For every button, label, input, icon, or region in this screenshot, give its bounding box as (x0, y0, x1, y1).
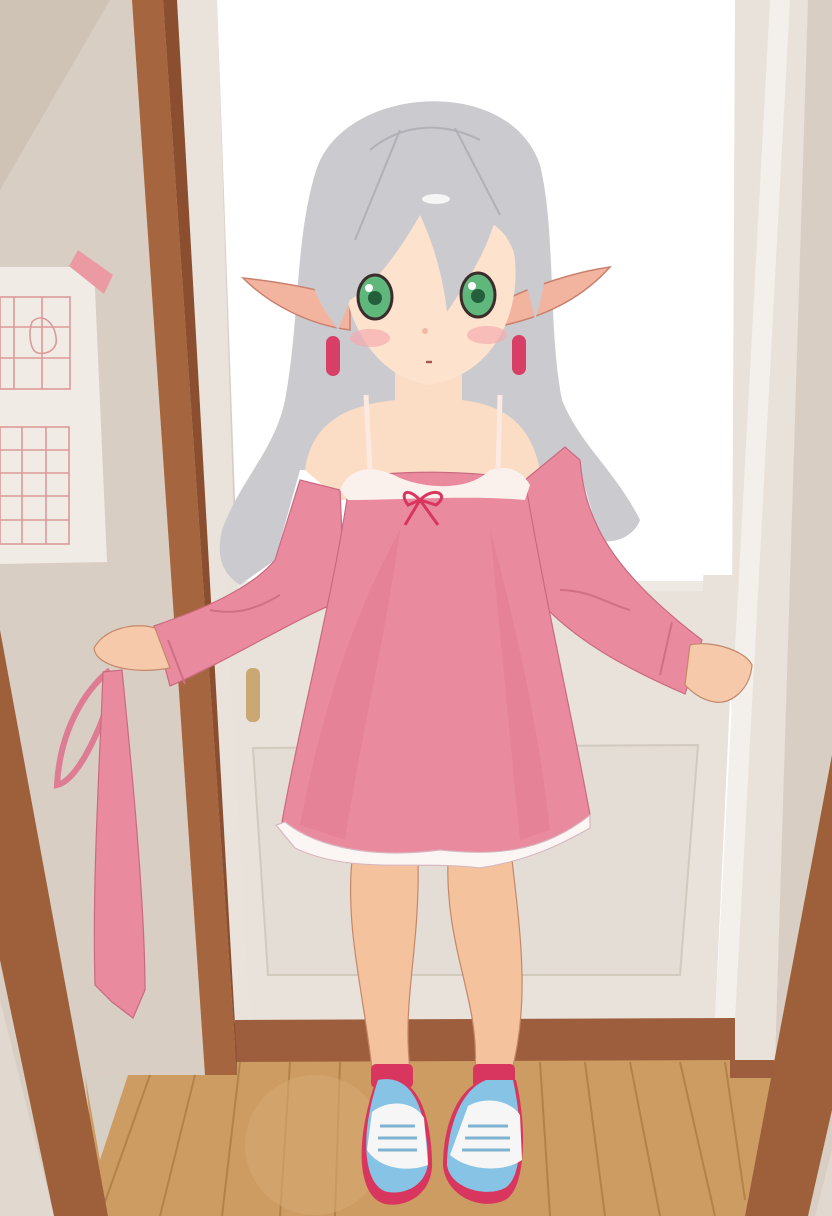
hair bangs (309, 104, 548, 330)
left sleeve (154, 480, 345, 686)
baseboard (235, 1018, 774, 1078)
ears (243, 267, 610, 330)
hands (94, 626, 752, 702)
foreground left door frame (0, 630, 108, 1216)
door panel (225, 575, 735, 1020)
left wall (0, 0, 240, 1216)
poster on wall (0, 250, 113, 564)
right sleeve (525, 447, 702, 694)
right wall (730, 0, 832, 1216)
blush and mouth (350, 326, 507, 362)
character (57, 101, 752, 1205)
door frame: white inner (175, 0, 808, 1060)
face (342, 206, 516, 385)
shoes (362, 1078, 523, 1205)
hair back (220, 101, 640, 585)
earrings (326, 335, 526, 376)
legs (351, 860, 522, 1070)
shoulders and neck (305, 370, 540, 500)
wooden floor (85, 1060, 775, 1216)
eyes (358, 273, 495, 319)
sleeve folds and cuffs (168, 590, 672, 684)
brown door jamb (132, 0, 237, 1075)
window (217, 0, 735, 591)
hanging pink strap (57, 670, 145, 1018)
foreground right door frame (745, 755, 832, 1216)
dress (276, 395, 590, 868)
socks (371, 1064, 515, 1088)
